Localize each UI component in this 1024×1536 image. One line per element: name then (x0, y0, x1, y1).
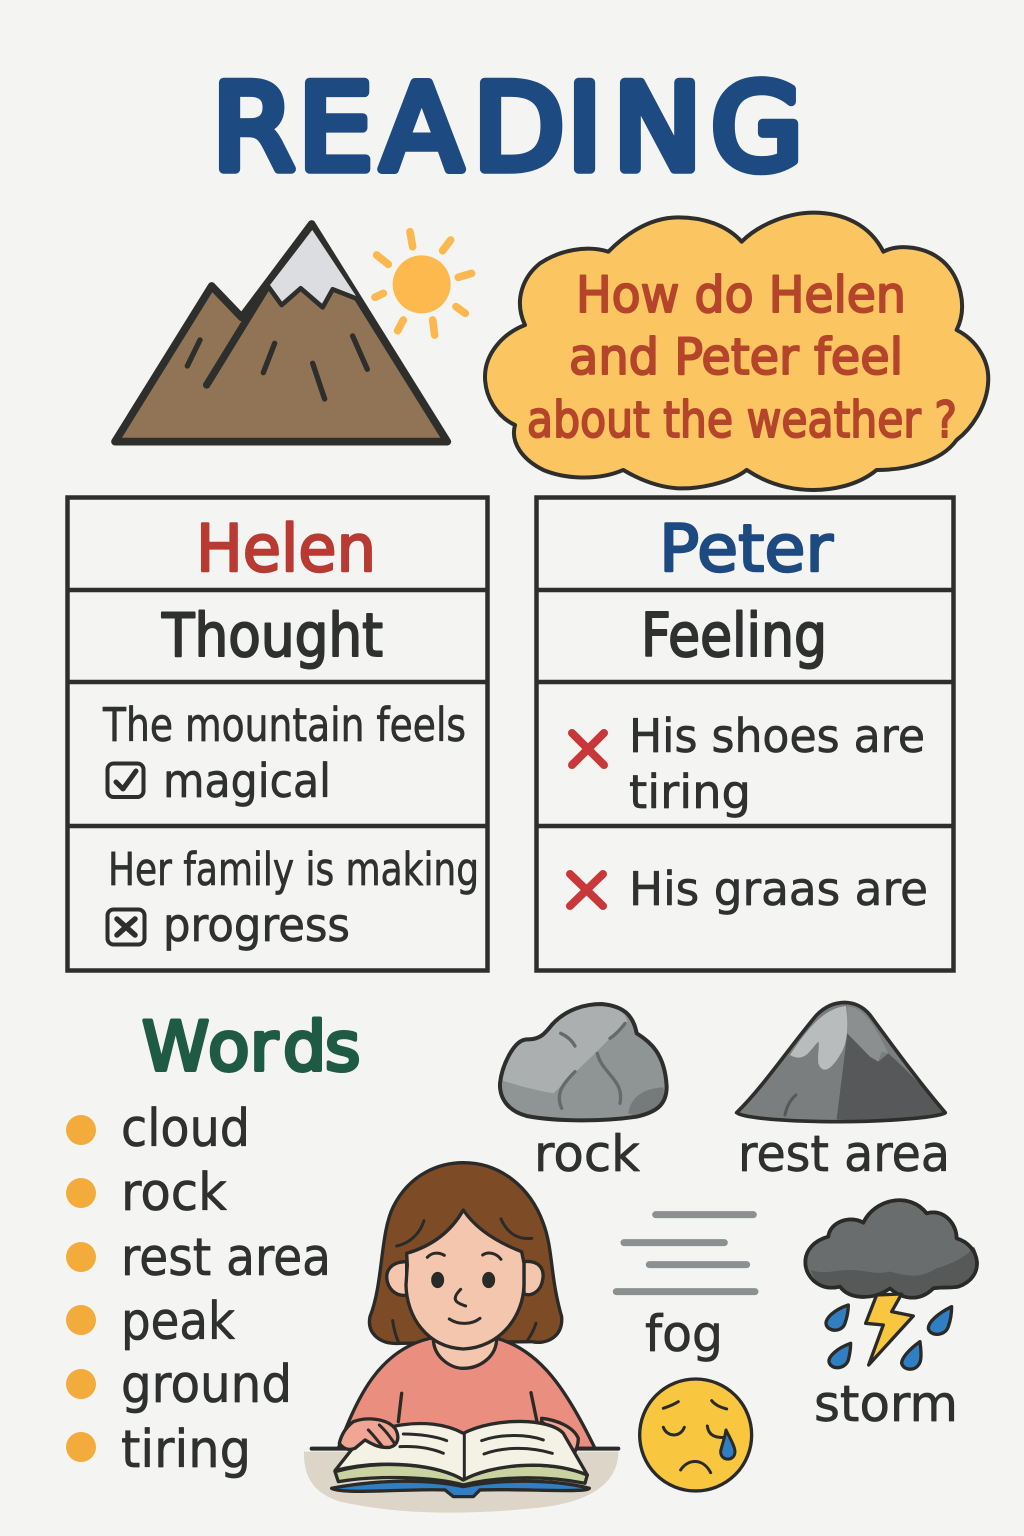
icon: fog lines (616, 1215, 755, 1292)
icon: storm cloud (805, 1200, 977, 1369)
title: READING (212, 60, 803, 198)
desk (304, 1452, 618, 1513)
book (332, 1421, 589, 1497)
right hand (542, 1418, 578, 1452)
question text: How do Helen (576, 266, 906, 324)
label: fog: fog (645, 1305, 723, 1363)
row: mountain feels magical (102, 698, 466, 808)
subheading: Feeling: Feeling (641, 601, 827, 671)
shirt (338, 1338, 595, 1448)
heading: Helen: Helen (196, 512, 376, 587)
left hand (339, 1419, 398, 1449)
icon: red cross (572, 733, 604, 765)
icon: crossed box (108, 910, 144, 944)
facial features (393, 1219, 536, 1343)
illustration: girl reading (304, 1163, 618, 1513)
fingers (368, 1425, 394, 1447)
row: mountain feels magical: magical (163, 754, 331, 808)
face (406, 1210, 524, 1349)
label: rest area: rest area (738, 1125, 950, 1183)
word list: ground (121, 1355, 292, 1415)
row: mountain feels magical: The mountain feels (102, 698, 466, 752)
label: rock: rock (534, 1125, 640, 1183)
panel: Helen table (67, 498, 488, 970)
question text: and Peter feel (569, 328, 903, 386)
ears (387, 1261, 543, 1295)
word list: tiring (121, 1420, 251, 1480)
word list: cloud (121, 1099, 250, 1159)
word list: rest area (121, 1228, 331, 1288)
icon: checked box (108, 764, 144, 797)
icon: rest area mountain (737, 1002, 945, 1122)
row: shoes tiring (572, 709, 925, 819)
row: family making progress: Her family is making (108, 843, 479, 896)
heading: Words: Words (142, 1008, 360, 1087)
hair (369, 1163, 562, 1343)
row: shoes tiring: His shoes are (629, 709, 925, 763)
question text: about the weather ? (527, 391, 957, 449)
lightning bolt (866, 1294, 913, 1365)
word list: rock (121, 1163, 227, 1223)
icon: sun (375, 232, 472, 335)
row: shoes tiring: tiring (629, 765, 751, 819)
icon: sad face (640, 1379, 752, 1491)
subheading: Thought: Thought (161, 601, 383, 671)
rain drops (826, 1305, 952, 1369)
icon: rock (500, 1004, 667, 1120)
icon: brown mountain (115, 224, 447, 442)
row: family making progress: progress (163, 898, 350, 952)
panel: Peter table (536, 498, 954, 970)
neck (433, 1338, 497, 1368)
desk line (312, 1443, 618, 1455)
icon: red cross (570, 874, 603, 906)
heading: Peter: Peter (659, 512, 833, 587)
callout: question cloud (485, 213, 988, 490)
arms (398, 1393, 537, 1423)
word list: peak (121, 1292, 235, 1352)
row: family making progress (108, 843, 479, 952)
label: storm: storm (814, 1375, 958, 1433)
question text (527, 266, 957, 449)
row: graas: His graas are (629, 862, 928, 916)
word list (66, 1099, 331, 1480)
